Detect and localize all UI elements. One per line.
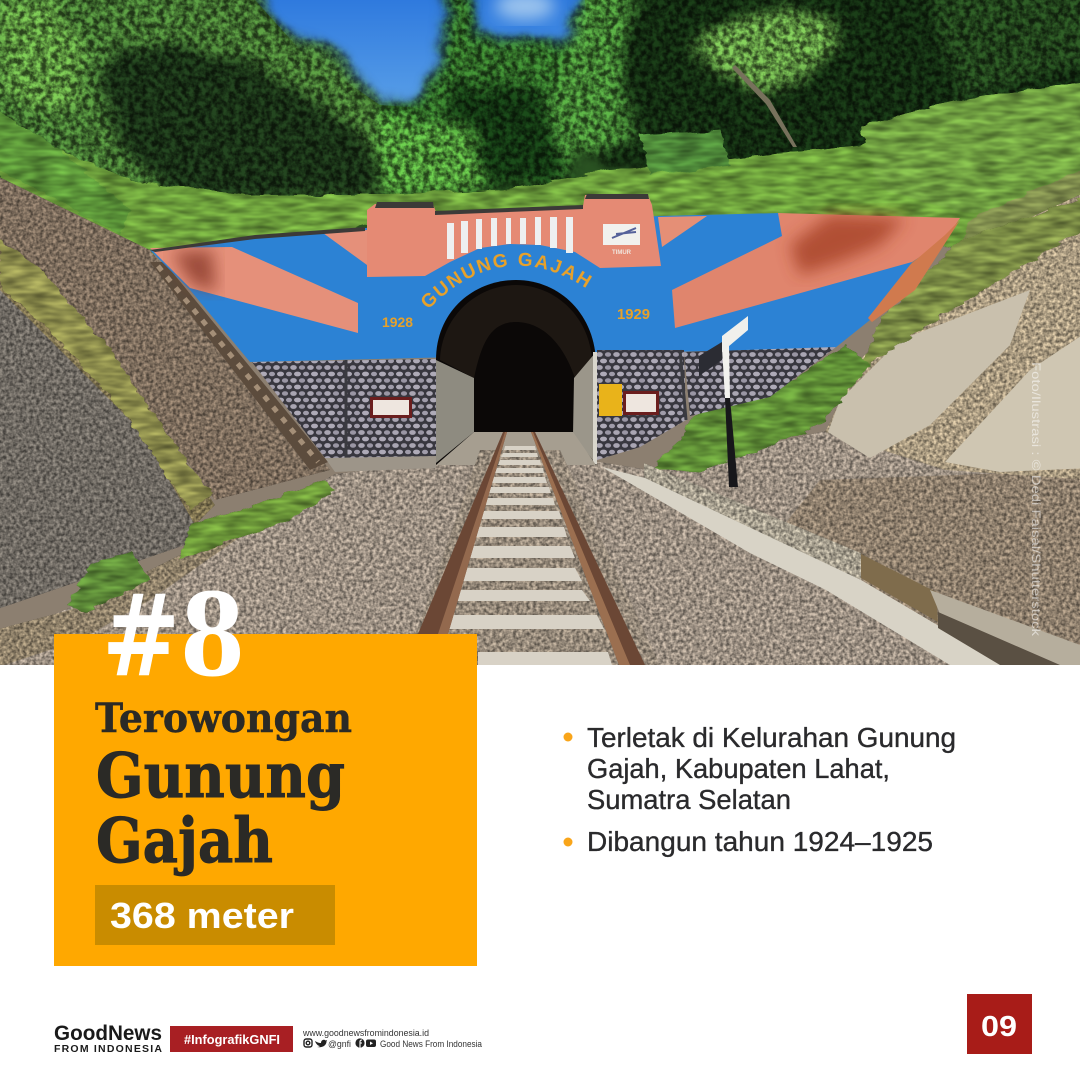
rank number: #8 bbox=[102, 569, 245, 702]
length badge bbox=[95, 885, 335, 945]
social handle: @gnfi bbox=[328, 1039, 351, 1049]
blue wall bbox=[150, 213, 915, 362]
social name: Good News From Indonesia bbox=[380, 1039, 482, 1049]
railway track bbox=[405, 432, 660, 665]
icon: instagram bbox=[304, 1039, 312, 1047]
photo: Gunung Gajah tunnel bbox=[0, 0, 1080, 665]
stone stairs bbox=[150, 262, 328, 470]
tunnel name on arch bbox=[428, 266, 640, 340]
icon: facebook bbox=[355, 1038, 365, 1048]
bullet dot 1 bbox=[564, 732, 572, 742]
background trees bbox=[0, 0, 1080, 215]
central salmon block bbox=[367, 195, 661, 277]
stone drain wall bbox=[644, 463, 861, 580]
drain brush bbox=[861, 554, 938, 622]
year left: 1928 bbox=[382, 315, 413, 330]
salmon right triangle bbox=[658, 216, 707, 247]
yellow sign bbox=[599, 384, 622, 416]
right rail bbox=[531, 432, 645, 665]
fact 1 bbox=[587, 722, 956, 815]
left stone embankment bbox=[0, 175, 330, 610]
top cap dark edges bbox=[150, 194, 649, 252]
concrete slabs bbox=[828, 290, 1030, 458]
GoodNews logo: GoodNews bbox=[54, 1022, 162, 1045]
length badge: 368 meter bbox=[110, 895, 294, 936]
dark sign board bbox=[699, 342, 722, 376]
salmon right stripe bbox=[672, 213, 960, 328]
hashtag badge: #InfografikGNFI bbox=[184, 1032, 280, 1047]
left tunnel wall bbox=[436, 360, 474, 463]
facts list bbox=[564, 722, 956, 857]
website: www.goodnewsfromindonesia.id bbox=[302, 1028, 429, 1038]
right hill vegetation bbox=[650, 195, 1080, 472]
year right: 1929 bbox=[617, 307, 650, 323]
photo credit: Foto/Ilustrasi : © Dedi Faisal/Shutterstock bbox=[1029, 362, 1043, 637]
central ballast bbox=[405, 450, 660, 665]
GoodNews logo: FROM INDONESIA bbox=[54, 1043, 162, 1055]
heading line 1: Terowongan bbox=[95, 695, 352, 742]
embankment grass strip bbox=[0, 240, 212, 510]
stone wall right outer bbox=[684, 347, 836, 416]
title card bbox=[54, 569, 477, 966]
cloud haze bbox=[495, 0, 555, 20]
signpost bbox=[699, 316, 748, 487]
wall base bbox=[325, 456, 436, 472]
left rail bbox=[418, 432, 507, 634]
wall pilasters bbox=[346, 350, 686, 458]
tunnel portal bbox=[150, 194, 960, 472]
photo backdrop bbox=[0, 0, 1080, 240]
dark shadow on left stripe bbox=[172, 250, 216, 292]
concrete wall right bbox=[930, 590, 1080, 665]
tree trunk bbox=[732, 65, 797, 147]
right hillside with concrete bbox=[825, 190, 1080, 480]
right tunnel wall bbox=[573, 352, 596, 464]
page number: 09 bbox=[981, 1011, 1017, 1043]
ground and ballast bbox=[0, 430, 1080, 670]
grass slope bbox=[0, 80, 1080, 320]
orange card background bbox=[54, 634, 477, 966]
tunnel opening bbox=[436, 280, 596, 465]
concrete drain wall bbox=[602, 463, 1080, 665]
stone wall right inner bbox=[597, 350, 686, 460]
concrete crack bbox=[938, 612, 1060, 665]
shrub shadow on right stripe bbox=[790, 215, 905, 275]
fact 2: Dibangun tahun 1924–1925 bbox=[587, 826, 933, 857]
railway logo bbox=[603, 224, 640, 256]
fact 1: Gajah, Kabupaten Lahat, bbox=[587, 753, 890, 784]
hashtag badge bbox=[170, 1026, 293, 1052]
white plaque left bbox=[370, 397, 412, 418]
railway logo: TIMUR bbox=[612, 250, 632, 256]
heading line 2: Gunung bbox=[96, 739, 345, 812]
salmon small left triangle bbox=[323, 230, 367, 265]
icon: youtube bbox=[366, 1040, 376, 1047]
page number bbox=[967, 994, 1032, 1054]
stone wall left bbox=[252, 359, 436, 458]
ground backdrop bbox=[0, 230, 1080, 665]
ventilation slots bbox=[447, 217, 573, 259]
tunnel floor bbox=[436, 432, 596, 465]
heading line 3: Gajah bbox=[96, 804, 273, 877]
lower left grass bbox=[68, 480, 335, 612]
concrete sleepers bbox=[434, 446, 612, 665]
white lower panel bbox=[0, 665, 1080, 1080]
fact 1: Terletak di Kelurahan Gunung bbox=[587, 722, 956, 753]
tunnel portal: GUNUNG GAJAH bbox=[422, 252, 592, 307]
post lower bbox=[725, 398, 738, 487]
salmon left stripe bbox=[150, 247, 358, 333]
white plaque right bbox=[623, 391, 659, 415]
sky bbox=[255, 0, 590, 110]
icon: twitter bbox=[315, 1040, 327, 1047]
GoodNews logo bbox=[54, 1022, 162, 1055]
footer bbox=[54, 994, 1032, 1055]
fact 1: Sumatra Selatan bbox=[587, 784, 791, 815]
orange wall edge bbox=[868, 220, 960, 322]
arch ribs bbox=[440, 285, 592, 378]
bullet dot 2 bbox=[564, 838, 572, 846]
post upper bbox=[722, 345, 730, 398]
white sign board bbox=[722, 316, 748, 352]
white drain walkway bbox=[602, 467, 1005, 665]
